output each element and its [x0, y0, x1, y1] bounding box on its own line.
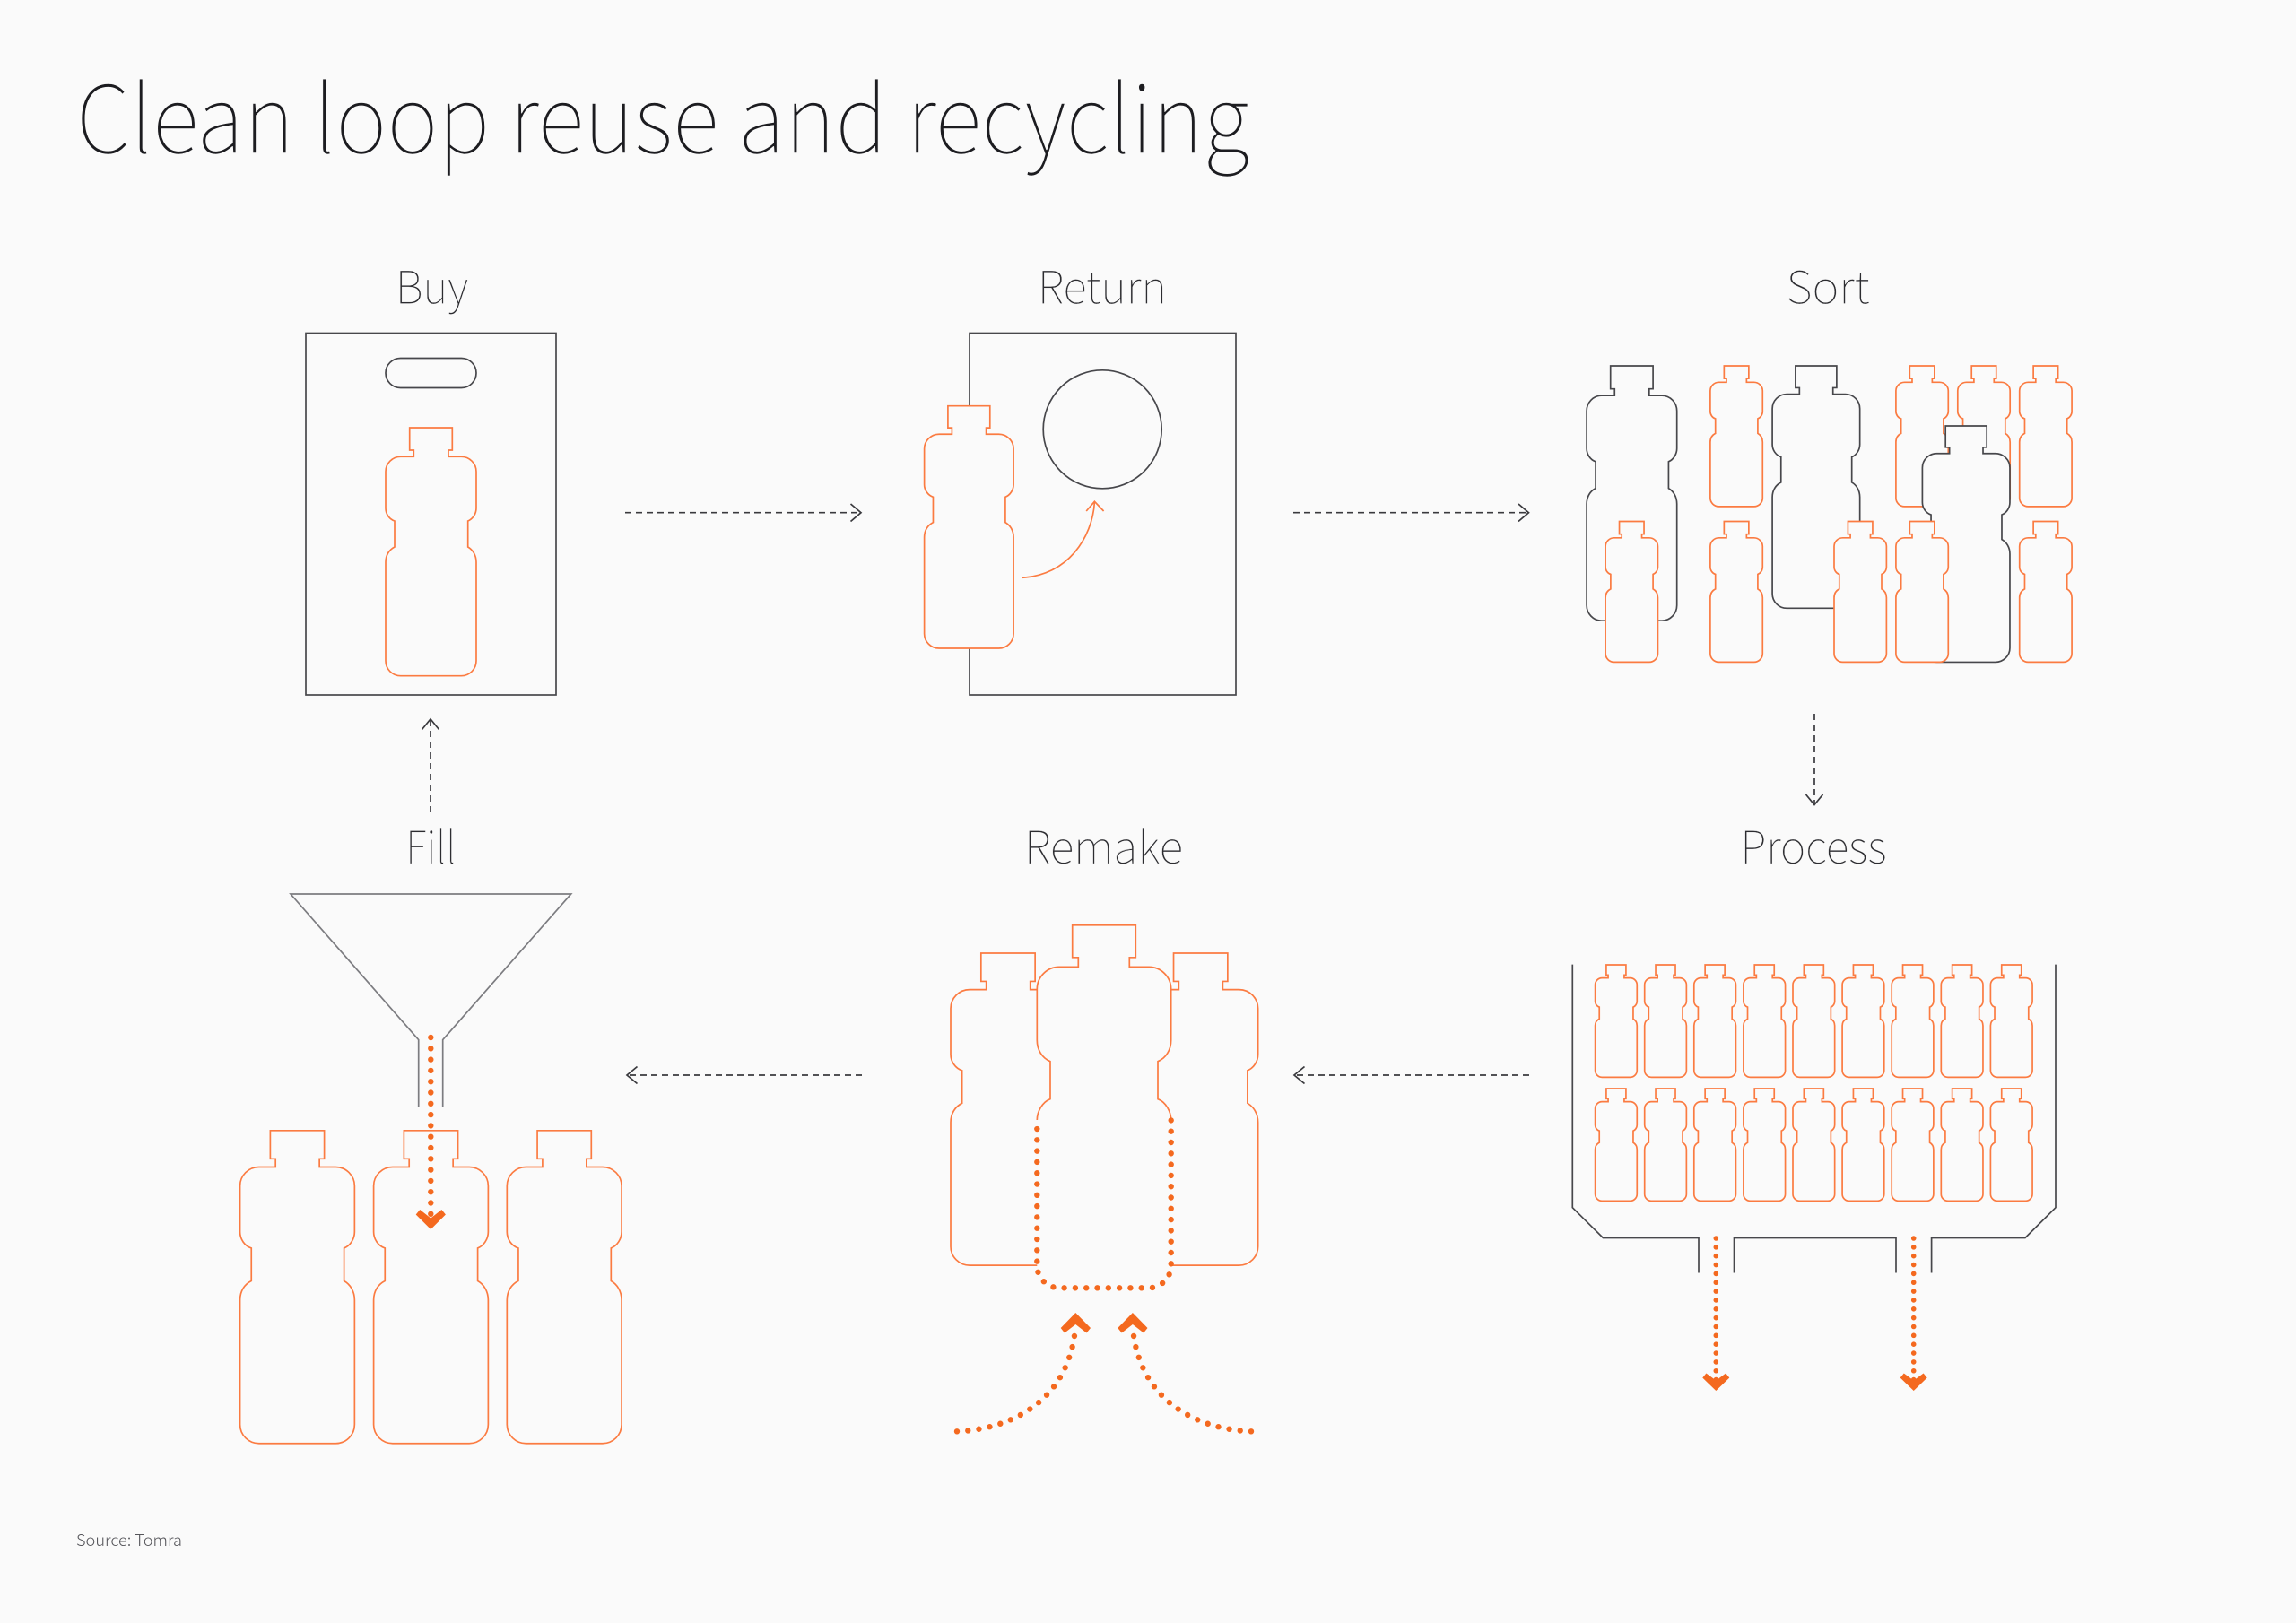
- heading: fill: Fill: [405, 812, 456, 877]
- arrow: filling flow: [416, 1037, 446, 1229]
- machine outline: [970, 334, 1236, 695]
- arrow: return to sort: [1293, 504, 1528, 522]
- panel: remake: [951, 812, 1258, 1431]
- arrow: remake to fill: [627, 1067, 862, 1083]
- icon: centre bottle with dotted base: [1037, 925, 1171, 1288]
- tray outline: [1572, 965, 2056, 1273]
- arrow: left inflow: [957, 1313, 1091, 1431]
- heading: buy: Buy: [396, 252, 468, 317]
- arrow: bottle into machine: [1022, 501, 1104, 577]
- bag outline: [306, 334, 556, 695]
- icon: bottle: [386, 428, 476, 676]
- machine opening: [1043, 370, 1161, 489]
- panel: fill: [240, 812, 622, 1444]
- arrow: right outflow: [1900, 1238, 1927, 1391]
- arrow: left outflow: [1702, 1238, 1729, 1391]
- bottles: bottom row: [1596, 1089, 2032, 1201]
- heading: remake: Remake: [1024, 812, 1183, 877]
- bottles: top row: [1596, 965, 2032, 1077]
- icon: bottle: [925, 406, 1013, 648]
- source note: Source: Tomra: [76, 1528, 182, 1551]
- icon: left bottle: [240, 1131, 354, 1444]
- icon: funnel: [291, 894, 571, 1107]
- panel: sort: [1587, 252, 2072, 662]
- icon: middle bottle: [374, 1131, 488, 1444]
- arrow: process to remake: [1294, 1067, 1529, 1083]
- heading: return: Return: [1038, 252, 1167, 317]
- arrow: sort to process: [1806, 714, 1822, 805]
- panel: process: [1572, 812, 2056, 1391]
- bag handle: [386, 359, 476, 387]
- arrow: right inflow: [1118, 1313, 1251, 1431]
- arrow: buy to return: [625, 504, 861, 522]
- panel: buy: [306, 252, 556, 695]
- heading: sort: Sort: [1787, 252, 1870, 317]
- title: Clean loop reuse and recycling: [76, 45, 1249, 180]
- icon: right bottle: [507, 1131, 622, 1444]
- bottles: sorted mix: [1587, 366, 2072, 662]
- icon: right bottle: [1144, 953, 1258, 1265]
- heading: process: Process: [1740, 812, 1887, 877]
- arrow: fill to buy: [422, 719, 439, 812]
- icon: left bottle: [951, 953, 1065, 1265]
- panel: return: [925, 252, 1236, 695]
